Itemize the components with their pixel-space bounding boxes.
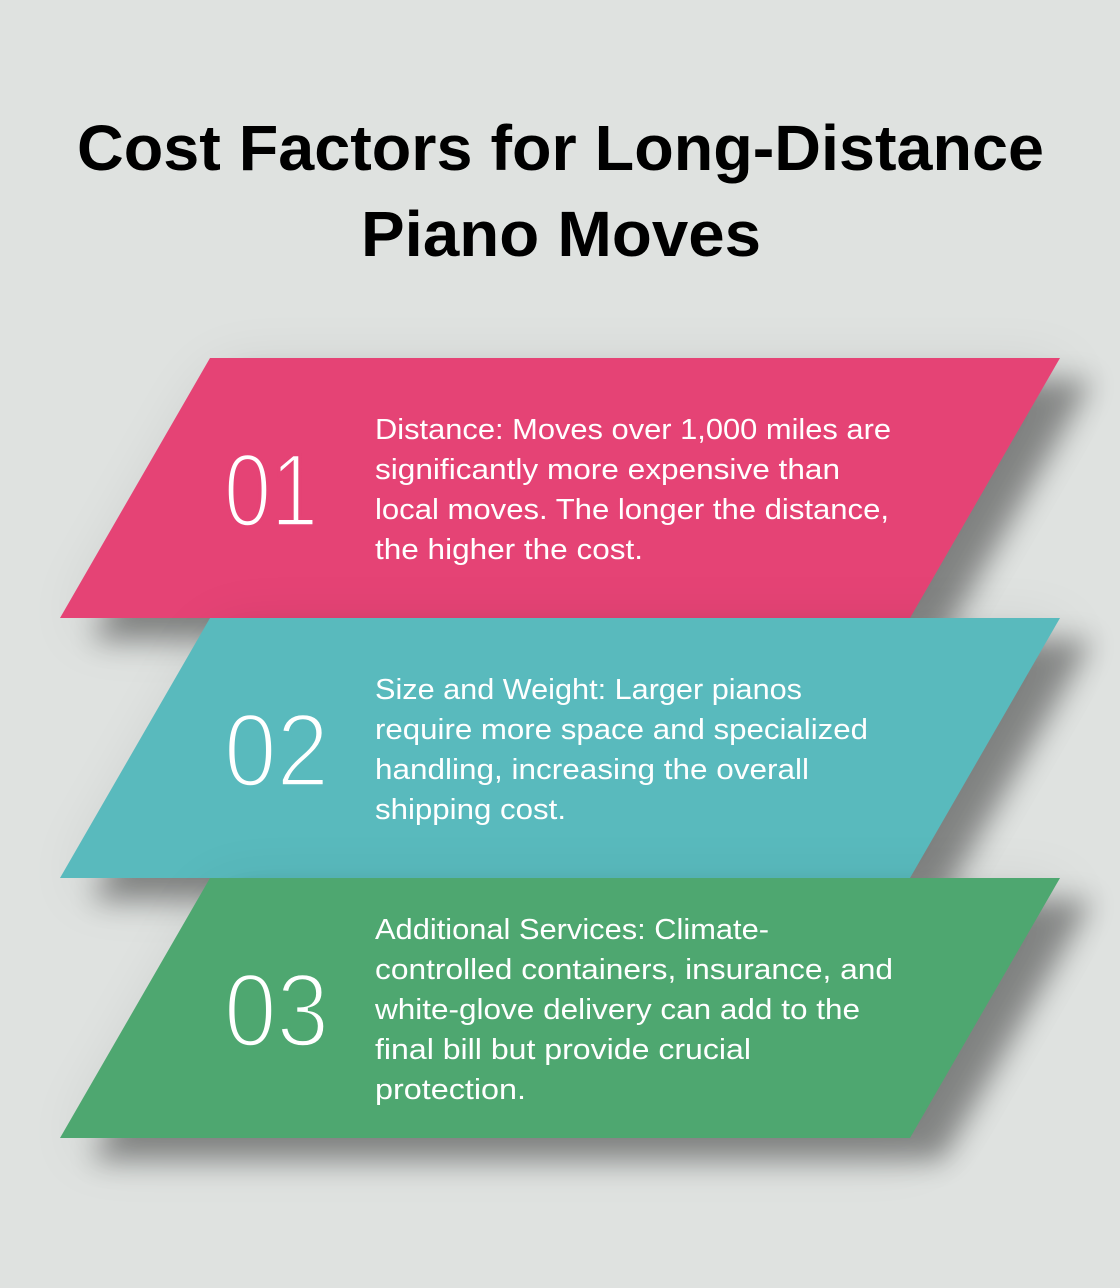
- text: distance: Distance: Moves over 1,000 miles are: [375, 414, 891, 446]
- text: additional services: final bill but provide crucial: [375, 1034, 751, 1066]
- text: size and weight: require more space and specialized: [375, 714, 868, 746]
- panel: 02 size and weight: [60, 618, 1092, 900]
- title: Cost Factors for Long-Distance: [77, 112, 1044, 184]
- text: additional services: controlled containers, insurance, and: [375, 954, 893, 986]
- number 01: 01: [224, 433, 318, 549]
- text: additional services: white-glove delivery can add to the: [374, 994, 860, 1026]
- text: size and weight: Size and Weight: Larger pianos: [375, 674, 802, 706]
- number 03: 03: [224, 953, 329, 1069]
- number 02: 02: [224, 693, 329, 809]
- text: distance: local moves. The longer the distance,: [375, 494, 889, 526]
- panel: 03 additional services: [60, 878, 1092, 1160]
- title: [77, 112, 1044, 270]
- text: distance: the higher the cost.: [375, 534, 643, 566]
- title: Piano Moves: [361, 198, 761, 270]
- text: distance: [375, 414, 891, 566]
- text: additional services: protection.: [375, 1074, 526, 1106]
- text: size and weight: [375, 674, 868, 826]
- text: size and weight: handling, increasing the overall: [375, 754, 809, 786]
- panel: 01 distance: [60, 358, 1092, 640]
- text: distance: significantly more expensive than: [375, 454, 840, 486]
- text: size and weight: shipping cost.: [375, 794, 566, 826]
- text: additional services: [374, 914, 893, 1106]
- text: additional services: Additional Services: Climate-: [375, 914, 769, 946]
